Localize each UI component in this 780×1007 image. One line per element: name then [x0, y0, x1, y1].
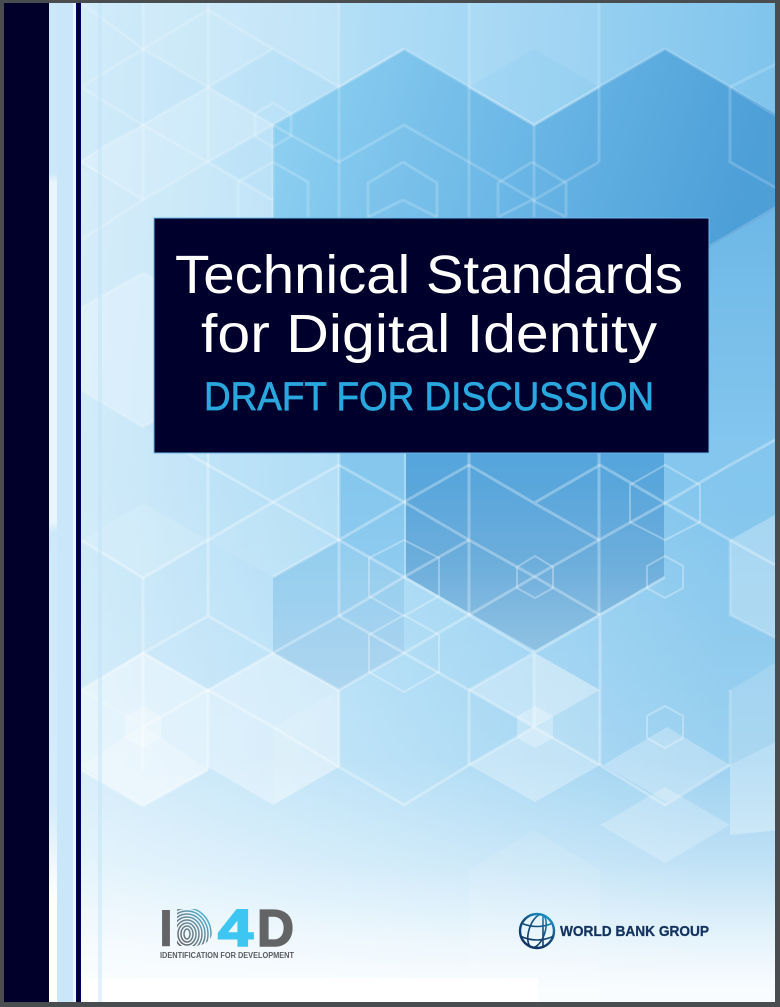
title panel: [154, 218, 709, 453]
logo: ID4D: IDENTIFICATION FOR DEVELOPMENT: [160, 951, 294, 960]
subtitle: DRAFT FOR DISCUSSION: [204, 375, 654, 419]
title: for Digital Identity: [201, 304, 657, 364]
icon: globe: [520, 912, 554, 950]
logo: World Bank Group: [520, 912, 709, 950]
logo: ID4D: D: [257, 900, 294, 958]
title: [175, 245, 683, 364]
logo: World Bank Group: WORLD BANK GROUP: [560, 923, 709, 940]
spine stripes: [4, 3, 81, 1002]
icon: fingerprint: [177, 909, 212, 946]
logo: ID4D: I: [159, 900, 173, 958]
logo: ID4D: 4: [218, 900, 253, 958]
title: Technical Standards: [175, 245, 683, 305]
logo: ID4D: [160, 909, 294, 958]
